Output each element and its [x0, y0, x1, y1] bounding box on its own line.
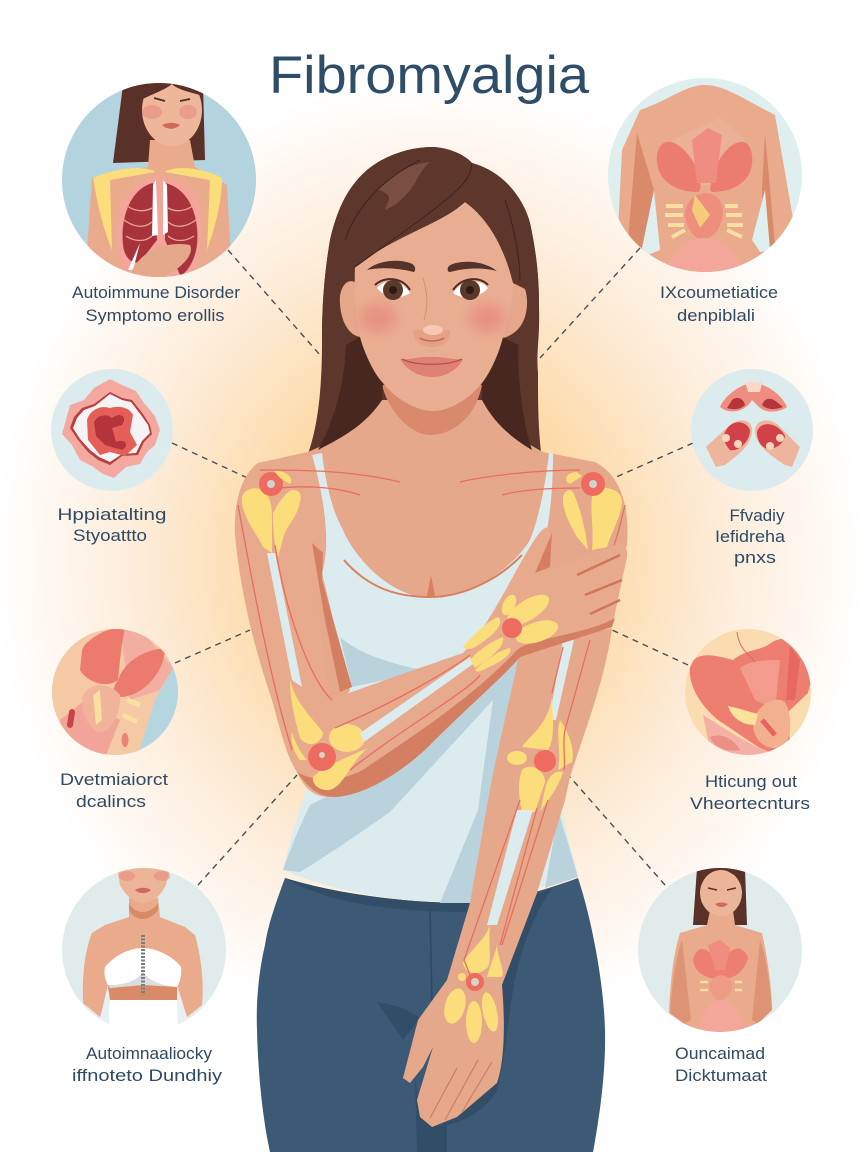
inner dark hair — [318, 337, 532, 450]
left arm and forearm — [235, 455, 627, 797]
label: Ouncaimad — [675, 1044, 765, 1063]
title: Fibromyalgia — [269, 46, 590, 105]
hair front — [322, 147, 539, 340]
neckline trim — [344, 555, 522, 597]
panel: middle left 2: dcalincs — [76, 792, 146, 811]
panel: bottom right: Dicktumaat — [675, 1066, 767, 1085]
panel: middle right 1: pnxs — [734, 548, 776, 567]
left arm skeleton — [238, 470, 625, 790]
panel: bottom left — [60, 865, 230, 1085]
panel: middle right 2 — [685, 628, 815, 813]
label: IXcoumetiatice — [660, 283, 778, 302]
label: Hppiatalting — [58, 505, 166, 524]
cheeks — [360, 304, 505, 332]
panel: middle left 1 — [50, 368, 175, 545]
label: Autoimnaaliocky — [86, 1044, 213, 1063]
panel: middle right 2: Vheortecnturs — [690, 794, 810, 813]
panel: middle left 1: Styoattto — [73, 526, 147, 545]
panel: top left: Symptomo erollis — [86, 306, 224, 325]
label: Ffvadiy — [730, 506, 785, 525]
tank shadow — [283, 637, 520, 903]
ears — [340, 280, 527, 338]
tank top — [283, 453, 578, 902]
panel: middle right 1 — [690, 368, 815, 567]
connector lines — [172, 248, 693, 885]
panel: bottom left: iffnoteto Dundhiy — [72, 1066, 223, 1085]
panel: bottom right — [635, 865, 805, 1085]
label: Hticung out — [705, 772, 797, 791]
pants shadows — [285, 878, 553, 1152]
panel: top right: denpiblali — [677, 306, 755, 325]
eyes — [367, 261, 497, 300]
label: Dvetmiaiorct — [60, 770, 168, 789]
torso and shoulders — [235, 400, 628, 720]
central figure — [235, 147, 628, 1152]
hair back — [308, 147, 541, 454]
face — [355, 202, 513, 411]
right arm skeleton — [430, 640, 590, 1120]
right arm lower — [403, 628, 612, 1127]
neck shadow — [382, 385, 482, 435]
panel: top left — [60, 74, 260, 325]
panel: middle right 1: Iefidreha — [715, 527, 786, 546]
pants — [257, 878, 605, 1152]
panel: middle left 2 — [50, 628, 185, 811]
forearm shadow — [297, 618, 615, 797]
panel: top right — [605, 75, 805, 325]
label: Autoimmune Disorder — [72, 283, 240, 302]
nose and mouth — [400, 278, 463, 377]
